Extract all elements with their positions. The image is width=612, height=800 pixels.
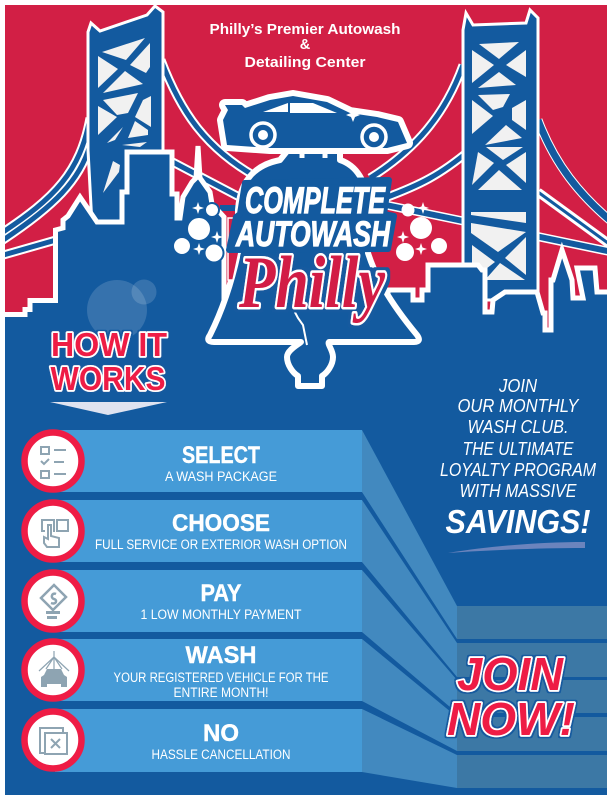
How it works heading: WORKS bbox=[50, 360, 166, 397]
left bridge tower bbox=[88, 6, 163, 225]
right bridge tower bbox=[463, 10, 538, 300]
logo: Complete Autowash: COMPLETE bbox=[245, 180, 386, 221]
tagline bbox=[210, 22, 400, 71]
background: red sky bbox=[5, 5, 607, 328]
step 1: select bbox=[24, 430, 362, 492]
bell crown slots bbox=[300, 154, 328, 158]
tagline: & bbox=[300, 37, 311, 53]
step 3: pay: PAY bbox=[200, 580, 242, 607]
swoosh bbox=[448, 542, 585, 553]
icon: hand with cash bbox=[41, 585, 66, 619]
step 1: select: SELECT bbox=[182, 442, 260, 469]
soap bubbles left bbox=[173, 202, 224, 262]
soap bubbles right bbox=[396, 202, 447, 261]
icon: car under spray bbox=[39, 651, 69, 687]
wash club text: WASH CLUB. bbox=[468, 416, 568, 437]
step 4: wash: YOUR REGISTERED VEHICLE FOR THE bbox=[114, 670, 328, 685]
liberty bell bbox=[208, 147, 419, 386]
step 2: choose: CHOOSE bbox=[172, 510, 270, 537]
logo: Philly script: Philly bbox=[238, 242, 386, 324]
step 3: pay: 1 LOW MONTHLY PAYMENT bbox=[140, 607, 302, 622]
step 5: no hassle bbox=[24, 709, 362, 772]
3D steps perspective bbox=[362, 430, 607, 788]
icon: hand choosing bbox=[42, 520, 68, 547]
red gap left of bell bbox=[228, 218, 239, 280]
wash club text: JOIN bbox=[498, 375, 538, 396]
logo: Complete Autowash: AUTOWASH bbox=[235, 215, 391, 254]
wash club text: WITH MASSIVE bbox=[460, 480, 577, 501]
bell crack bbox=[294, 312, 308, 346]
How it works heading: HOW IT bbox=[51, 326, 167, 363]
icon: checklist bbox=[41, 447, 66, 478]
wheels bbox=[251, 123, 386, 149]
join now call to action: JOIN bbox=[457, 648, 564, 700]
step 2: choose: FULL SERVICE OR EXTERIOR WASH OPTION bbox=[95, 537, 347, 552]
tagline: Philly’s Premier Autowash bbox=[210, 22, 400, 38]
tagline: Detailing Center bbox=[244, 55, 366, 71]
icon: cancel windows bbox=[40, 728, 67, 754]
step 3: pay bbox=[24, 570, 362, 632]
step 4: wash: WASH bbox=[186, 642, 256, 669]
bridge cables bbox=[0, 60, 612, 256]
join now call to action: NOW! bbox=[447, 693, 575, 745]
car bbox=[223, 96, 407, 149]
wash club text bbox=[440, 375, 596, 540]
step 4: wash bbox=[24, 639, 362, 701]
wash club text: OUR MONTHLY bbox=[458, 395, 580, 416]
join now call to action bbox=[447, 648, 575, 745]
step 5: no hassle: HASSLE CANCELLATION bbox=[152, 747, 290, 762]
How it works heading bbox=[50, 326, 167, 397]
arrow down bbox=[50, 402, 167, 415]
step 5: no hassle: NO bbox=[203, 720, 239, 747]
step 2: choose bbox=[24, 500, 362, 562]
star sparkle bbox=[346, 113, 360, 122]
logo: Complete Autowash bbox=[229, 180, 394, 254]
wash club text: SAVINGS! bbox=[446, 503, 591, 540]
wash club text: THE ULTIMATE bbox=[462, 438, 574, 459]
step 4: wash: ENTIRE MONTH! bbox=[174, 685, 268, 700]
faint bubble watermark bbox=[87, 280, 156, 340]
step 1: select: A WASH PACKAGE bbox=[165, 469, 277, 484]
